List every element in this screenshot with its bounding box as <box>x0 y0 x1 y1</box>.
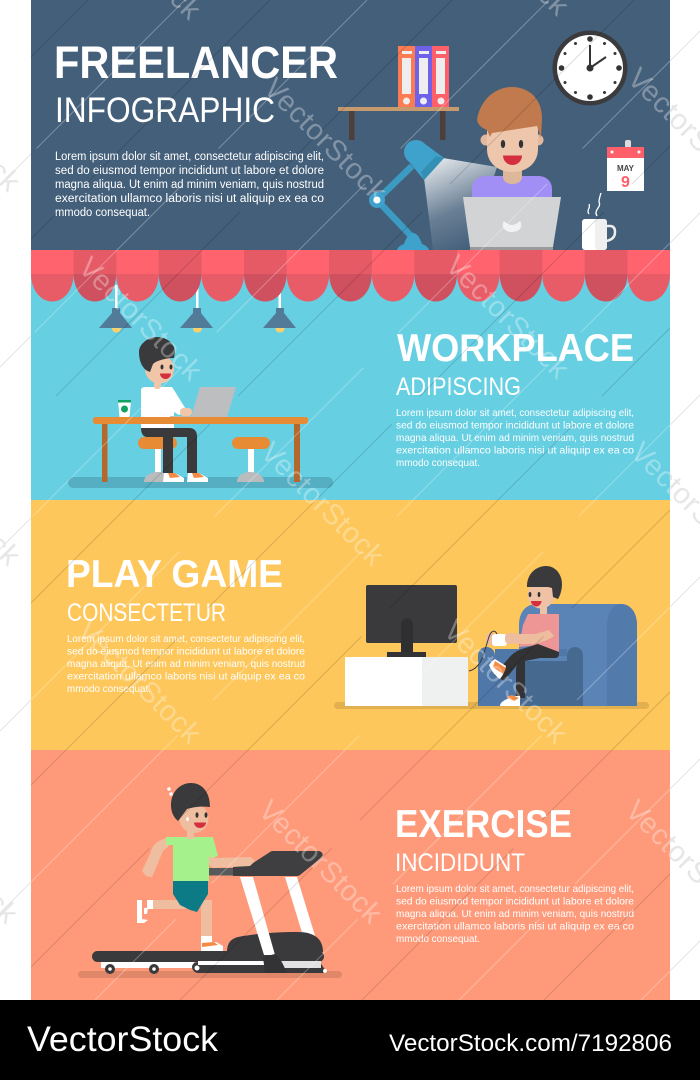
icon: laptop <box>463 197 561 250</box>
awning <box>31 250 670 302</box>
watermark text <box>71 0 700 930</box>
text block: exercise description: mmodo consequat. <box>396 934 480 945</box>
text block: header description: Lorem ipsum dolor sit amet, consectetur adipiscing elit, <box>55 151 324 163</box>
figure: freelancer at laptop <box>463 87 561 250</box>
text block: exercise description: magna aliqua. Ut enim ad minim veniam, quis nostrud <box>396 909 634 920</box>
subheading: adipiscing: ADIPISCING <box>396 373 521 401</box>
floor shadow <box>334 702 649 709</box>
icon: pendant lamps <box>99 285 296 332</box>
icon: calendar <box>607 140 644 191</box>
heading: exercise: EXERCISE <box>395 803 572 846</box>
icon: calendar: 9 <box>621 174 630 191</box>
text block: header description <box>55 151 324 219</box>
text block: workplace description: exercitation ullamco laboris nisi ut aliquip ex ea co <box>396 446 634 456</box>
panel: play game <box>31 500 670 750</box>
icon: sweat drops <box>167 787 189 821</box>
text block: exercise description: exercitation ullamco laboris nisi ut aliquip ex ea co <box>396 922 634 932</box>
text block: workplace description <box>396 408 634 469</box>
title: freelancer: FREELANCER <box>54 37 338 88</box>
figure: man playing game <box>469 566 562 706</box>
watermark text: VectorStock <box>439 249 575 385</box>
text block: workplace description: magna aliqua. Ut enim ad minim veniam, quis nostrud <box>396 433 634 444</box>
footer url: VectorStock.com/7192806 <box>389 1030 672 1057</box>
icon: calendar: MAY <box>617 164 635 173</box>
icon: wall clock <box>552 30 628 106</box>
text block: play game description: sed do eiusmod tempor incididunt ut labore et dolore <box>67 646 305 658</box>
subtitle: infographic: INFOGRAPHIC <box>55 91 275 130</box>
icon: shelf with binders <box>338 46 459 140</box>
watermark text: VectorStock <box>437 614 573 750</box>
heading: play game: PLAY GAME <box>66 553 283 596</box>
panel: freelancer header <box>31 0 670 250</box>
text block: play game description: exercitation ullamco laboris nisi ut aliquip ex ea co <box>67 672 305 682</box>
text block: exercise description <box>396 884 634 945</box>
watermark text: VectorStock <box>257 72 393 208</box>
footer logo: VectorStock <box>27 1020 219 1059</box>
text block: workplace description: mmodo consequat. <box>396 458 480 469</box>
text block: header description: exercitation ullamco laboris nisi ut aliquip ex ea co <box>55 193 324 205</box>
footer bar <box>0 1000 700 1080</box>
desk top <box>93 417 308 424</box>
text block: workplace description: sed do eiusmod tempor incididunt ut labore et dolore <box>396 420 634 432</box>
text block: header description: mmodo consequat. <box>55 207 150 219</box>
icon: laptop <box>170 387 236 418</box>
text block: play game description: magna aliqua. Ut enim ad minim veniam, quis nostrud <box>67 659 305 670</box>
text block: header description: magna aliqua. Ut enim ad minim veniam, quis nostrud <box>55 179 324 191</box>
heading: workplace: WORKPLACE <box>397 327 634 370</box>
watermark text: VectorStock <box>252 794 388 930</box>
watermark text: VectorStock <box>254 436 390 572</box>
figure: running man <box>137 783 255 951</box>
subheading: incididunt: INCIDIDUNT <box>395 849 525 877</box>
figure: man at desk <box>139 337 208 482</box>
icon: sofa <box>478 604 637 706</box>
icon: coffee mug <box>582 193 615 250</box>
text block: workplace description: Lorem ipsum dolor sit amet, consectetur adipiscing elit, <box>396 408 634 419</box>
panel: exercise <box>31 750 670 1000</box>
icon: coffee cup <box>118 400 131 417</box>
text block: play game description: mmodo consequat. <box>67 684 151 695</box>
icon: treadmill <box>92 851 327 974</box>
text block: header description: sed do eiusmod tempor incididunt ut labore et dolore <box>55 165 324 177</box>
panel: workplace <box>31 250 670 500</box>
floor shadow <box>78 971 342 978</box>
text block: play game description: Lorem ipsum dolor sit amet, consectetur adipiscing elit, <box>67 634 305 645</box>
watermark text: VectorStock <box>72 251 208 387</box>
text block: exercise description: sed do eiusmod tempor incididunt ut labore et dolore <box>396 896 634 908</box>
icon: television on stand <box>345 585 468 706</box>
watermark text: VectorStock <box>71 614 207 750</box>
text block: exercise description: Lorem ipsum dolor sit amet, consectetur adipiscing elit, <box>396 884 634 895</box>
text block: play game description <box>67 634 305 695</box>
icon: desk lamp <box>369 140 497 250</box>
floor shadow <box>68 477 333 488</box>
icon: desk and stools <box>102 424 300 482</box>
subheading: consectetur: CONSECTETUR <box>67 599 226 627</box>
